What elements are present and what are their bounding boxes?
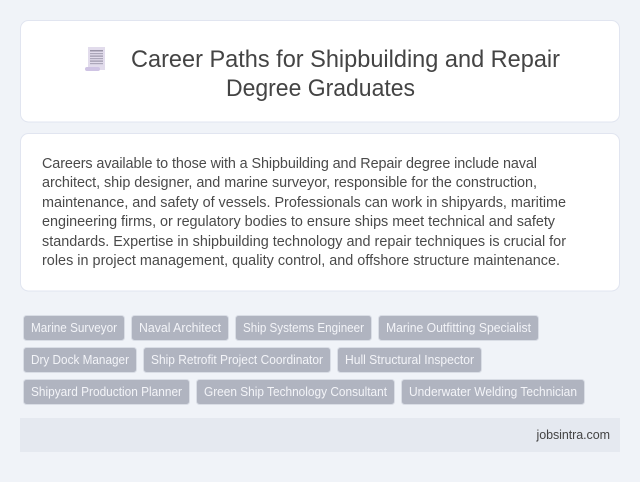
footer bar xyxy=(20,418,620,452)
description text: Careers available to those with a Shipbuilding and Repair degree include naval xyxy=(42,156,537,172)
tag: Shipyard Production Planner: Shipyard Production Planner xyxy=(31,385,182,399)
icon: paper scroll xyxy=(85,47,105,71)
tag: Ship Systems Engineer xyxy=(236,316,372,340)
tag: Dry Dock Manager xyxy=(24,348,136,372)
description text: standards. Expertise in shipbuilding technology and repair techniques is crucial for xyxy=(42,234,566,250)
panel: title card xyxy=(20,20,620,122)
tag: Naval Architect xyxy=(132,316,228,340)
tag: Naval Architect: Naval Architect xyxy=(139,321,222,335)
tag: Hull Structural Inspector: Hull Structural Inspector xyxy=(345,353,474,367)
description text xyxy=(42,156,566,269)
tag: Hull Structural Inspector xyxy=(338,348,482,372)
tag: Marine Outfitting Specialist xyxy=(378,316,538,340)
tag: Marine Surveyor xyxy=(24,316,124,340)
tag: Marine Outfitting Specialist: Marine Outfitting Specialist xyxy=(386,321,532,335)
description text: maintenance, and safety of vessels. Professionals can work in shipyards, maritime xyxy=(42,195,566,211)
footer site name: jobsintra.com xyxy=(536,428,610,442)
tag: Marine Surveyor: Marine Surveyor xyxy=(31,321,117,335)
tag: Ship Retrofit Project Coordinator: Ship Retrofit Project Coordinator xyxy=(151,353,323,367)
tag: Dry Dock Manager: Dry Dock Manager xyxy=(31,353,129,367)
tag: Ship Systems Engineer: Ship Systems Engineer xyxy=(243,321,364,335)
panel: description card xyxy=(20,134,620,291)
description text: engineering firms, or regulatory bodies to ensure ships meet technical and safety xyxy=(42,214,556,230)
tag: Green Ship Technology Consultant: Green Ship Technology Consultant xyxy=(204,385,387,399)
description text: roles in project management, quality control, and offshore structure maintenance. xyxy=(42,253,560,269)
tag: Underwater Welding Technician xyxy=(402,380,584,404)
career tags xyxy=(24,316,584,404)
title: Career Paths for Shipbuilding and Repair xyxy=(131,46,560,73)
description text: architect, ship designer, and marine surveyor, responsible for the construction, xyxy=(42,175,537,191)
tag: Green Ship Technology Consultant xyxy=(196,380,394,404)
tag: Ship Retrofit Project Coordinator xyxy=(144,348,330,372)
tag: Underwater Welding Technician: Underwater Welding Technician xyxy=(409,385,577,399)
title xyxy=(131,46,560,102)
title: Degree Graduates xyxy=(226,75,415,102)
tag: Shipyard Production Planner xyxy=(24,380,190,404)
